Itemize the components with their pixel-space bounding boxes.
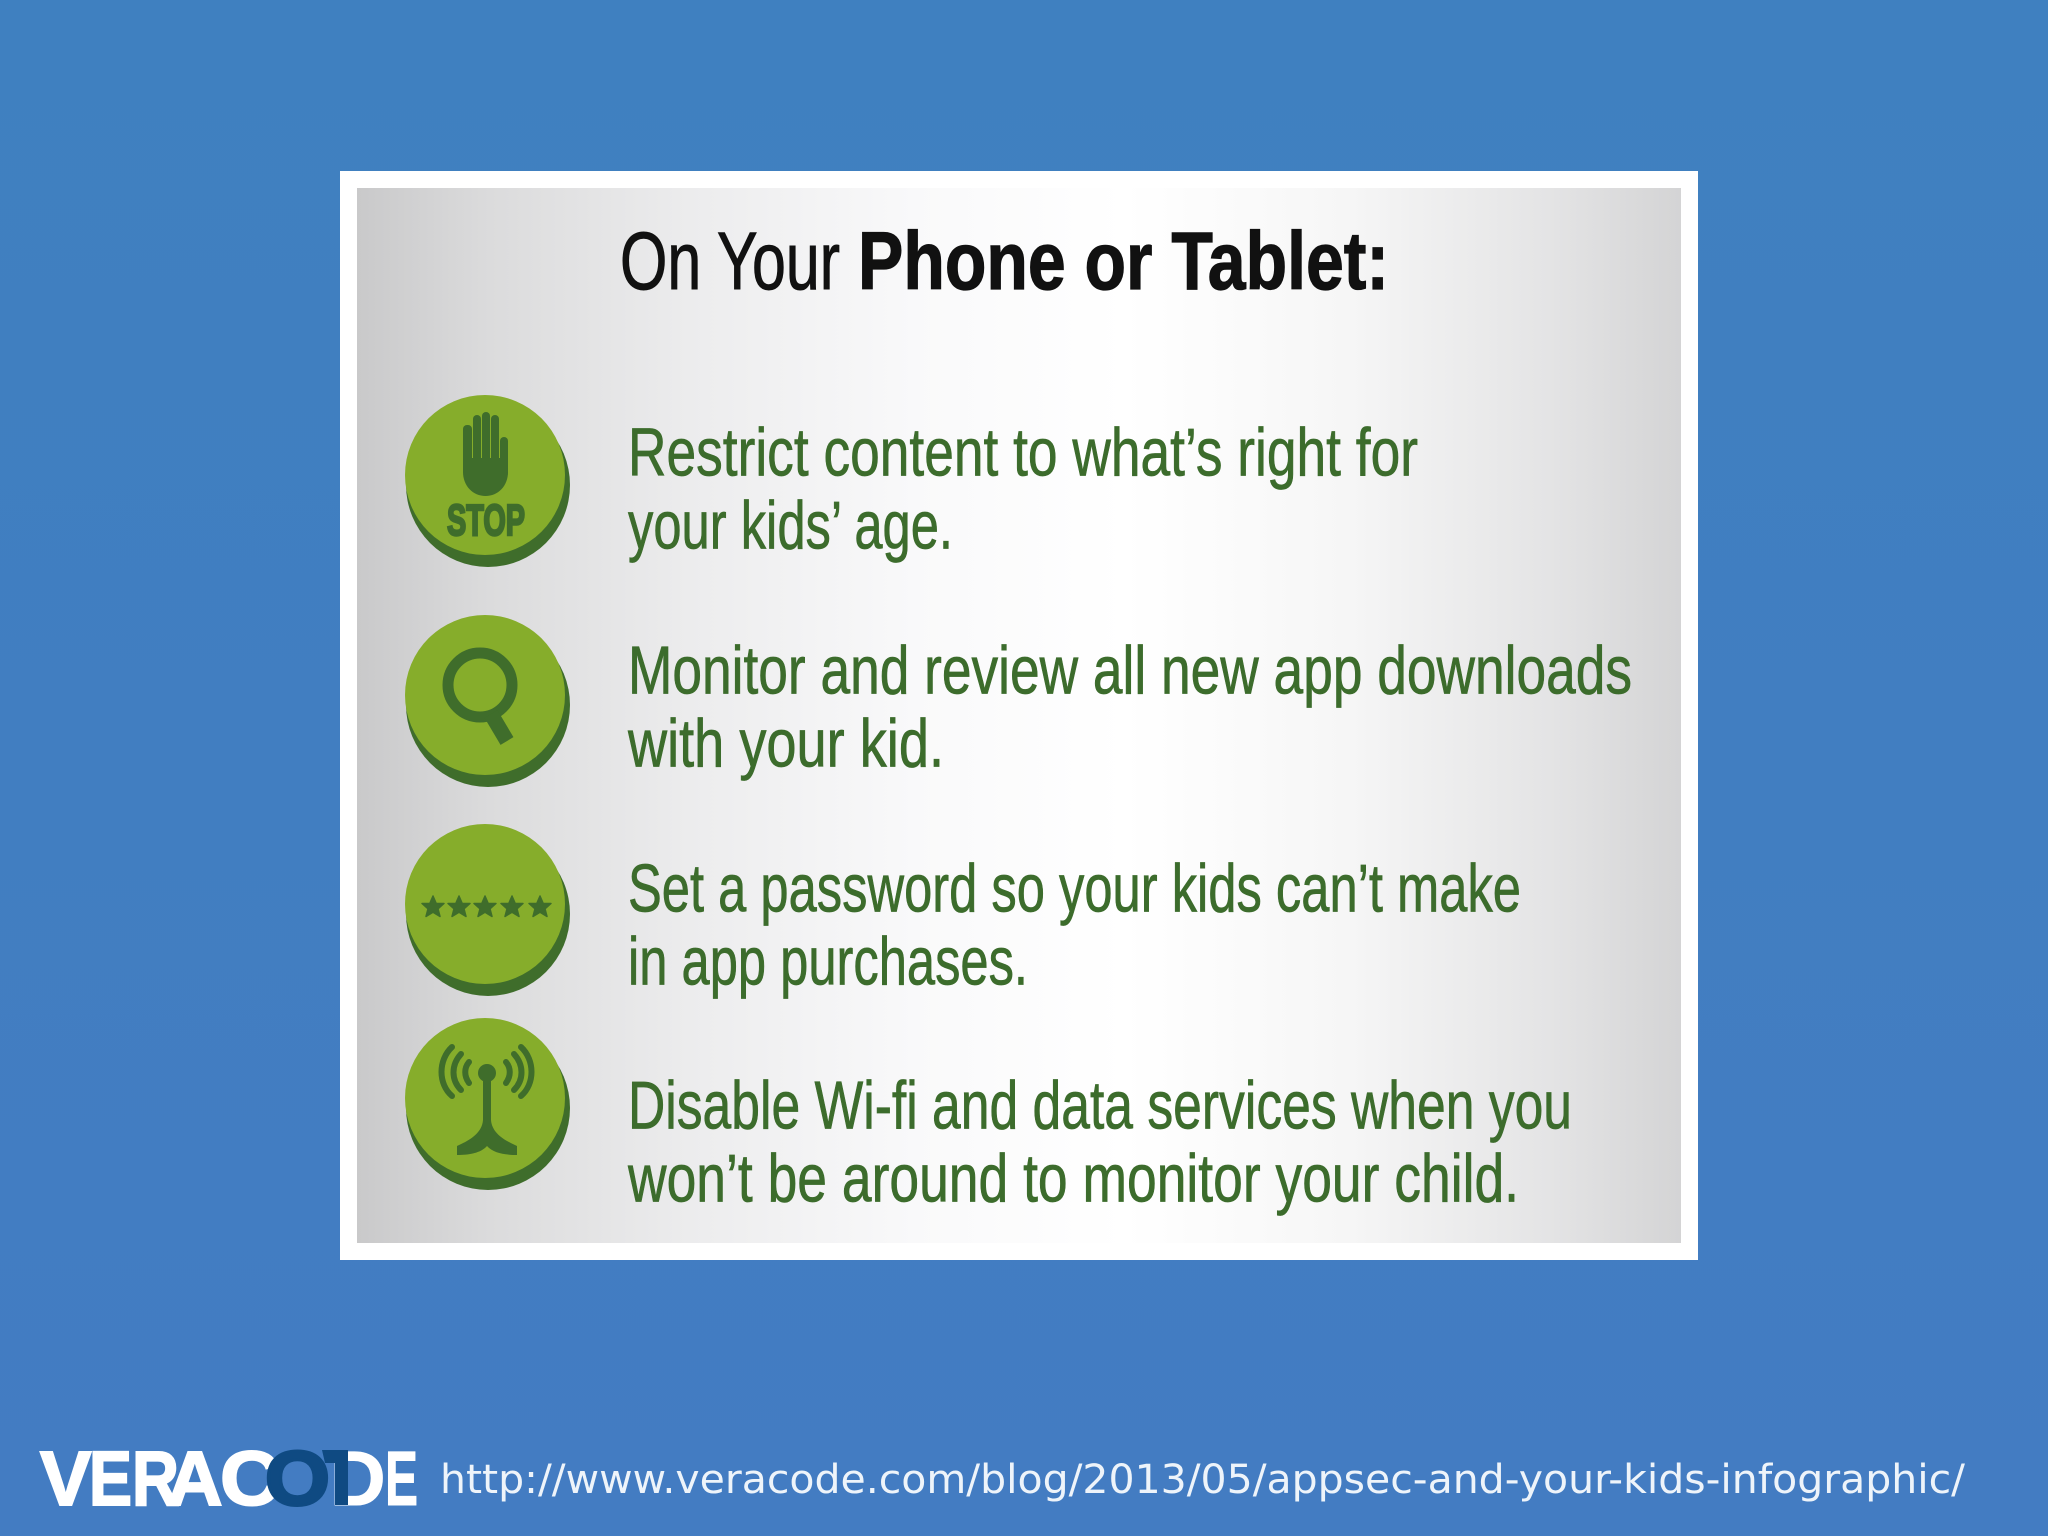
- source url: http://www.veracode.com/blog/2013/05/appsec-and-your-kids-infographic/: [440, 1457, 1966, 1503]
- tip 1 text: your kids’ age.: [628, 488, 953, 564]
- logo: Veracode: C: [220, 1436, 280, 1522]
- logo: Veracode: D: [330, 1436, 386, 1522]
- logo: Veracode: R: [132, 1436, 179, 1522]
- icon: stop hand: STOP: [447, 496, 525, 545]
- tip 2 text: with your kid.: [627, 706, 944, 782]
- icon: stop hand: [405, 395, 570, 567]
- tip 1 text: [628, 414, 1418, 564]
- tip 4 text: Disable Wi-fi and data services when you: [628, 1068, 1572, 1144]
- icon: magnifying glass: [405, 615, 570, 787]
- logo: Veracode: V: [40, 1436, 91, 1522]
- title: On Your: [620, 216, 840, 307]
- logo: Veracode: E: [385, 1436, 418, 1522]
- tip 4 text: [627, 1068, 1572, 1216]
- logo: Veracode: [40, 1436, 418, 1522]
- logo: Veracode: E: [89, 1436, 132, 1522]
- icon: wifi antenna: [405, 1018, 570, 1190]
- tip 1 text: Restrict content to what’s right for: [628, 414, 1418, 490]
- tip 3 text: [628, 850, 1521, 1000]
- logo: Veracode: A: [167, 1436, 223, 1522]
- tip 4 text: won’t be around to monitor your child.: [627, 1140, 1519, 1216]
- title: Phone or Tablet:: [858, 216, 1389, 307]
- logo: Veracode: O: [265, 1436, 330, 1522]
- tip 3 text: Set a password so your kids can’t make: [628, 850, 1521, 926]
- title: [620, 216, 1389, 307]
- panel: phone or tablet tips: [340, 171, 1698, 1260]
- icon: password stars: [405, 824, 570, 996]
- tip 3 text: in app purchases.: [628, 924, 1028, 1000]
- tip 2 text: Monitor and review all new app downloads: [628, 632, 1632, 708]
- tip 2 text: [627, 632, 1632, 782]
